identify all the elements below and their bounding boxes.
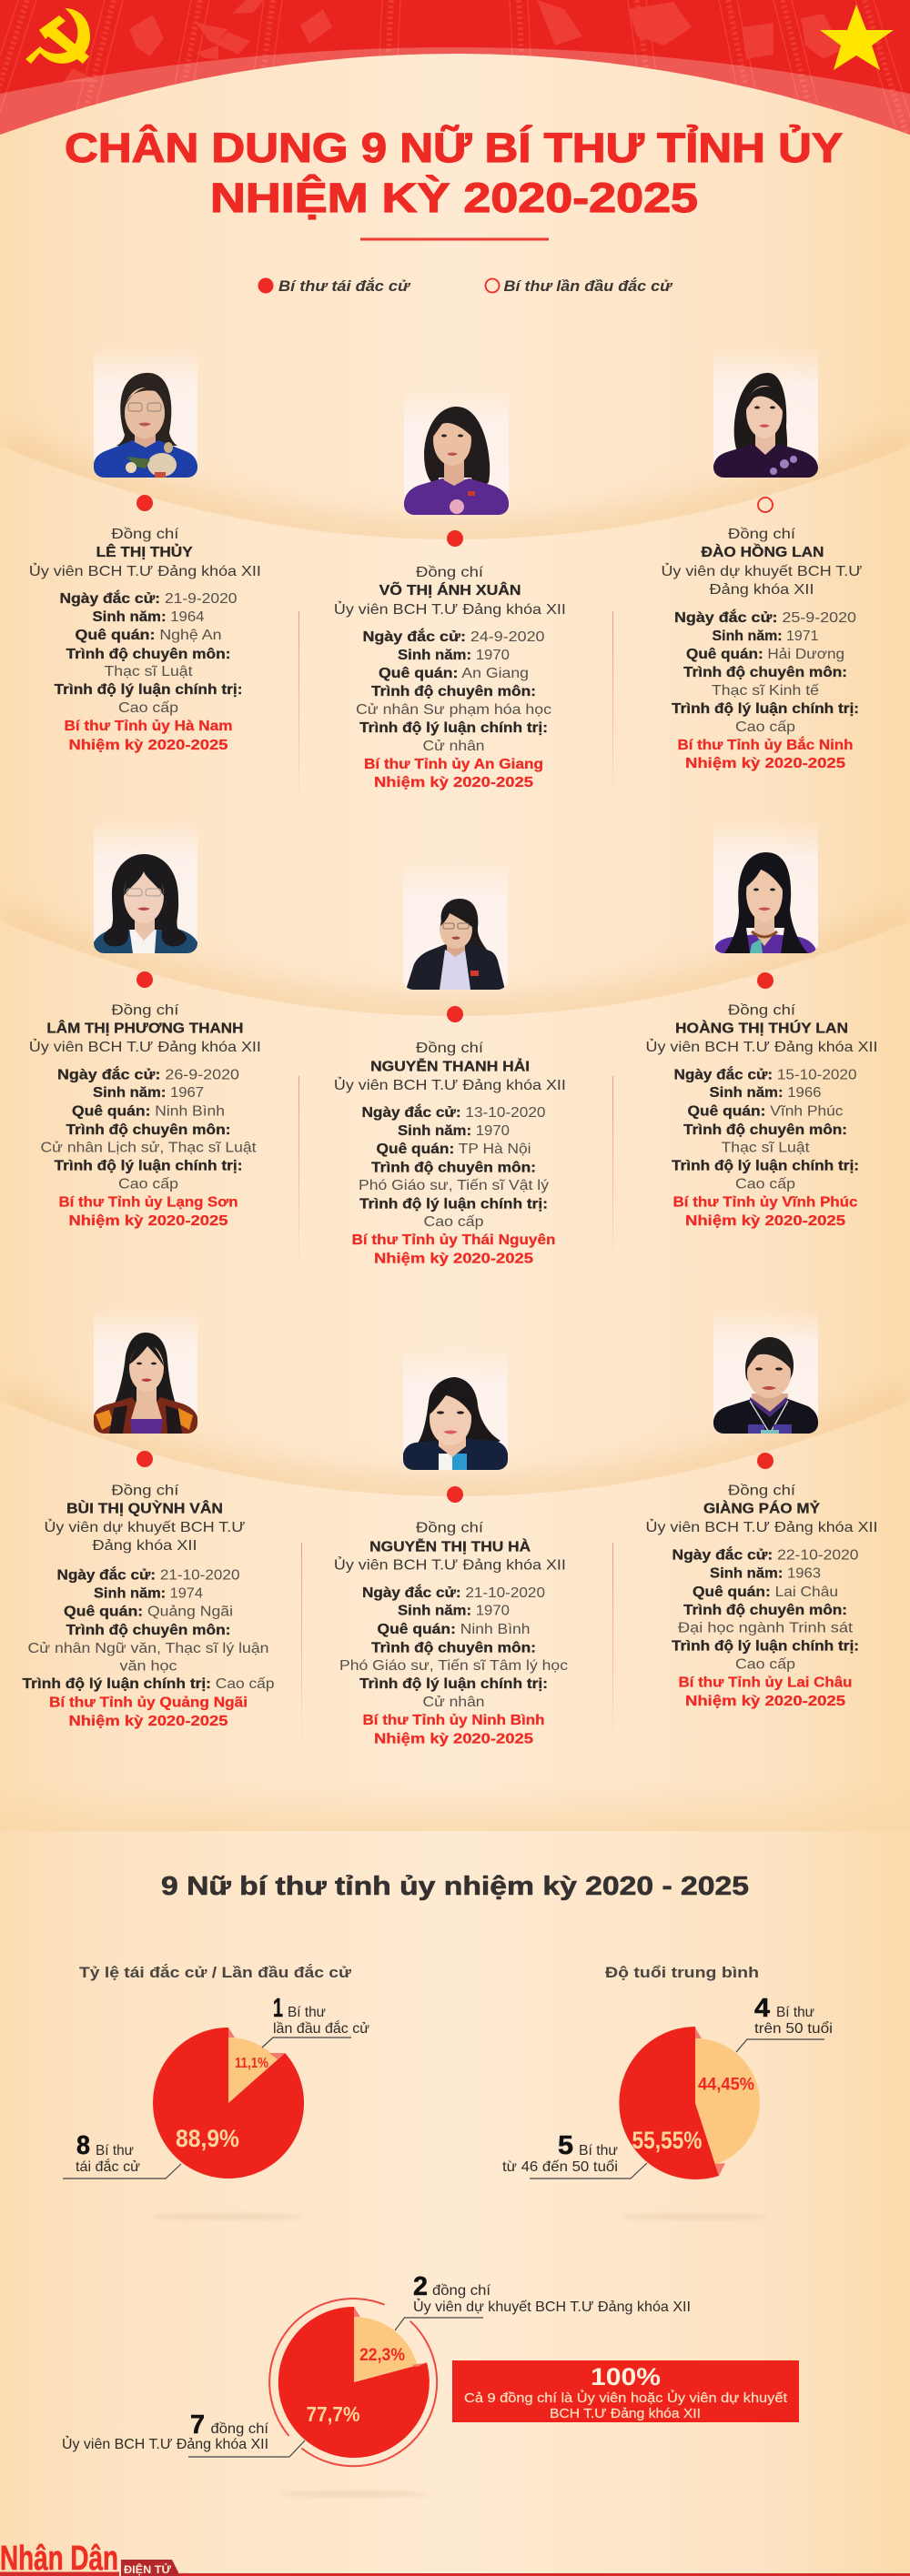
bio text: Giang Pao My: Nhiệm kỳ 2020-2025 bbox=[685, 1694, 845, 1709]
bio text: Le Thi Thuy bbox=[29, 527, 261, 753]
portrait: Lam Thi Phuong Thanh bbox=[94, 819, 197, 953]
bio text: Bui Thi Quynh Van: Cử nhân Ngữ văn, Thạc sĩ lý luận bbox=[27, 1641, 269, 1656]
callout: first elected: 1 bbox=[273, 1994, 283, 2023]
column dividers bbox=[298, 611, 613, 1747]
bio text: Bui Thi Quynh Van: Ngày đắc cử: 21-10-2020 bbox=[56, 1566, 240, 1583]
box text: Cả 9 đồng chí là Ủy viên hoặc Ủy viên dự khuyết bbox=[464, 2390, 788, 2406]
callout box: 100 percent bbox=[452, 2360, 799, 2422]
bio text: Nguyen Thi Thu Ha bbox=[334, 1521, 568, 1746]
bio text: Giang Pao My: Trình độ lý luận chính trị: bbox=[672, 1639, 859, 1654]
portrait: Bui Thi Quynh Van bbox=[94, 1307, 197, 1434]
bio text: Hoang Thi Thuy Lan: Cao cấp bbox=[735, 1177, 795, 1192]
portrait: Nguyen Thanh Hai bbox=[403, 860, 508, 990]
bio text: Giang Pao My bbox=[646, 1483, 877, 1709]
bio text: Giang Pao My: GIÀNG PÁO MỶ bbox=[703, 1499, 820, 1517]
bio text: Nguyen Thanh Hai: Trình độ chuyên môn: bbox=[371, 1161, 536, 1175]
bio text: Hoang Thi Thuy Lan: HOÀNG THỊ THÚY LAN bbox=[675, 1019, 848, 1037]
bio text: Lam Thi Phuong Thanh: LÂM THỊ PHƯƠNG THANH bbox=[46, 1019, 243, 1037]
bio text: Hoang Thi Thuy Lan: Bí thư Tỉnh ủy Vĩnh Phúc bbox=[673, 1195, 858, 1210]
bio text: Nguyen Thi Thu Ha: Cử nhân bbox=[422, 1695, 484, 1710]
panel: Nguyen Thanh Hai bbox=[334, 860, 566, 1266]
bio text: Bui Thi Quynh Van: Nhiệm kỳ 2020-2025 bbox=[69, 1714, 228, 1729]
callout: 46 to 50: từ 46 đến 50 tuổi bbox=[502, 2158, 618, 2175]
callout: alternate members: 2 bbox=[413, 2272, 428, 2301]
bio text: Lam Thi Phuong Thanh: Trình độ chuyên môn: bbox=[66, 1122, 231, 1138]
panel: Dao Hong Lan bbox=[661, 346, 863, 771]
panel: Nguyen Thi Thu Ha bbox=[334, 1346, 568, 1746]
callout: full members bbox=[62, 2410, 305, 2457]
bio text: Lam Thi Phuong Thanh: Cao cấp bbox=[118, 1177, 178, 1192]
legend label: first elected: Bí thư lần đầu đắc cử bbox=[504, 277, 673, 295]
bio text: Lam Thi Phuong Thanh: Đồng chí bbox=[111, 1002, 179, 1019]
bio text: Nguyen Thanh Hai: Ủy viên BCH T.Ư Đảng khóa XII bbox=[334, 1076, 566, 1093]
bio text: Giang Pao My: Bí thư Tỉnh ủy Lai Châu bbox=[679, 1675, 852, 1690]
panel: Le Thi Thuy bbox=[29, 346, 261, 753]
bio text: Dao Hong Lan: Đảng khóa XII bbox=[710, 582, 814, 598]
status ring bbox=[758, 498, 773, 512]
bio text: Lam Thi Phuong Thanh: Bí thư Tỉnh ủy Lạng Sơn bbox=[58, 1195, 238, 1210]
panel: Hoang Thi Thuy Lan bbox=[646, 819, 877, 1229]
chart title: Độ tuổi trung bình bbox=[605, 1964, 759, 1981]
panel: Giang Pao My bbox=[646, 1307, 877, 1709]
bio text: Dao Hong Lan: Quê quán: Hải Dương bbox=[686, 647, 844, 662]
callout: over 50: Bí thư bbox=[776, 2005, 814, 2020]
slice label: 11.1 percent: 11,1% bbox=[235, 2056, 268, 2071]
bio text: Nguyen Thanh Hai: Nhiệm kỳ 2020-2025 bbox=[374, 1252, 533, 1266]
portrait: Le Thi Thuy bbox=[94, 346, 197, 478]
bio text: Le Thi Thuy: LÊ THỊ THỦY bbox=[96, 543, 193, 560]
panel: Vo Thi Anh Xuan bbox=[334, 387, 566, 790]
statistics heading: 9 Nữ bí thư tỉnh ủy nhiệm kỳ 2020 - 2025 bbox=[161, 1872, 749, 1901]
bio text: Nguyen Thanh Hai: NGUYỄN THANH HẢI bbox=[370, 1057, 530, 1075]
bio text: Le Thi Thuy: Ngày đắc cử: 21-9-2020 bbox=[60, 589, 238, 607]
box text: BCH T.Ư Đảng khóa XII bbox=[550, 2406, 701, 2421]
legend bbox=[258, 277, 673, 295]
bio text: Dao Hong Lan: Bí thư Tỉnh ủy Bắc Ninh bbox=[677, 736, 854, 753]
footer rule bbox=[0, 2572, 910, 2576]
bio text: Vo Thi Anh Xuan: Quê quán: An Giang bbox=[379, 666, 529, 681]
portrait: Vo Thi Anh Xuan bbox=[404, 387, 509, 515]
callout: re-elected: Bí thư bbox=[96, 2143, 134, 2158]
bio text: Dao Hong Lan: Sinh năm: 1971 bbox=[712, 629, 819, 644]
bio text: Nguyen Thanh Hai: Quê quán: TP Hà Nội bbox=[377, 1142, 531, 1157]
bio text: Hoang Thi Thuy Lan: Đồng chí bbox=[728, 1002, 796, 1019]
bio text: Bui Thi Quynh Van: Bí thư Tỉnh ủy Quảng Ngãi bbox=[49, 1696, 248, 1710]
bio text: Vo Thi Anh Xuan bbox=[334, 565, 566, 790]
portrait: Hoang Thi Thuy Lan bbox=[713, 819, 818, 953]
callout: first elected bbox=[262, 1994, 369, 2048]
slice label: 44.45 percent: 44,45% bbox=[698, 2076, 754, 2094]
bio text: Dao Hong Lan: Nhiệm kỳ 2020-2025 bbox=[685, 756, 845, 771]
slice label: 55.55 percent: 55,55% bbox=[632, 2127, 703, 2154]
bio text: Dao Hong Lan: ĐÀO HỒNG LAN bbox=[701, 543, 824, 560]
status dot bbox=[447, 1486, 463, 1503]
portrait: Nguyen Thi Thu Ha bbox=[403, 1346, 508, 1470]
bio text: Hoang Thi Thuy Lan: Ngày đắc cử: 15-10-2020 bbox=[673, 1066, 857, 1082]
bio text: Lam Thi Phuong Thanh: Nhiệm kỳ 2020-2025 bbox=[69, 1213, 228, 1229]
bio text: Dao Hong Lan: Trình độ chuyên môn: bbox=[683, 665, 847, 680]
callout: re-elected bbox=[63, 2131, 181, 2179]
bio text: Dao Hong Lan: Ngày đắc cử: 25-9-2020 bbox=[674, 609, 856, 626]
bio text: Nguyen Thi Thu Ha: NGUYỄN THỊ THU HÀ bbox=[369, 1537, 531, 1555]
bio text: Lam Thi Phuong Thanh bbox=[29, 1002, 261, 1229]
status dot bbox=[136, 495, 153, 511]
callout: first elected: lần đầu đắc cử bbox=[273, 2019, 369, 2037]
bio text: Vo Thi Anh Xuan: Ủy viên BCH T.Ư Đảng khóa XII bbox=[334, 600, 566, 618]
callout: over 50: 4 bbox=[754, 1994, 770, 2023]
status dot bbox=[447, 530, 463, 547]
callout: full members: Ủy viên BCH T.Ư Đảng khóa XII bbox=[62, 2435, 268, 2452]
status dot bbox=[136, 1451, 153, 1467]
bio text: Nguyen Thanh Hai: Ngày đắc cử: 13-10-2020 bbox=[362, 1103, 546, 1121]
bio text: Le Thi Thuy: Bí thư Tỉnh ủy Hà Nam bbox=[64, 719, 233, 734]
row arcs bbox=[0, 446, 910, 1496]
bio text: Giang Pao My: Đồng chí bbox=[728, 1483, 796, 1499]
bio text: Le Thi Thuy: Cao cấp bbox=[118, 700, 178, 716]
bio text: Lam Thi Phuong Thanh: Trình độ lý luận chính trị: bbox=[55, 1159, 242, 1173]
callout: re-elected: tái đắc cử bbox=[76, 2158, 140, 2175]
pie shadow bbox=[152, 2214, 303, 2219]
bio text: Giang Pao My: Trình độ chuyên môn: bbox=[683, 1603, 847, 1618]
bio text: Le Thi Thuy: Đồng chí bbox=[111, 527, 179, 542]
bio text: Bui Thi Quynh Van: Đảng khóa XII bbox=[93, 1538, 197, 1554]
bio text: Vo Thi Anh Xuan: Cử nhân Sư phạm hóa học bbox=[356, 702, 551, 718]
bio text: Nguyen Thi Thu Ha: Ngày đắc cử: 21-10-2020 bbox=[362, 1584, 545, 1601]
bio text: Hoang Thi Thuy Lan bbox=[646, 1002, 877, 1229]
bio text: Nguyen Thi Thu Ha: Phó Giáo sư, Tiến sĩ Tâm lý học bbox=[339, 1658, 568, 1674]
pie slices bbox=[153, 2028, 304, 2179]
slice label: 88.9 percent: 88,9% bbox=[176, 2125, 239, 2152]
status dot bbox=[757, 972, 774, 989]
header band bbox=[0, 0, 910, 146]
callout: over 50 bbox=[736, 1994, 833, 2052]
title: NHIỆM KỲ 2020-2025 bbox=[210, 175, 698, 221]
tab text: ĐIỆN TỬ bbox=[124, 2562, 171, 2576]
bio text: Hoang Thi Thuy Lan: Nhiệm kỳ 2020-2025 bbox=[685, 1213, 845, 1229]
bio text: Bui Thi Quynh Van: BÙI THỊ QUỲNH VÂN bbox=[66, 1499, 223, 1517]
bio text: Lam Thi Phuong Thanh: Ủy viên BCH T.Ư Đảng khóa XII bbox=[29, 1038, 261, 1055]
bio text: Vo Thi Anh Xuan: Ngày đắc cử: 24-9-2020 bbox=[362, 628, 545, 645]
bio text: Nguyen Thi Thu Ha: Bí thư Tỉnh ủy Ninh Bình bbox=[362, 1713, 544, 1728]
bio text: Nguyen Thi Thu Ha: Sinh năm: 1970 bbox=[398, 1603, 510, 1619]
bio text: Nguyen Thanh Hai: Trình độ lý luận chính trị: bbox=[359, 1197, 548, 1212]
panel: Bui Thi Quynh Van bbox=[22, 1307, 275, 1729]
digital tab bbox=[121, 2560, 180, 2576]
callout: alternate members: đồng chí bbox=[432, 2283, 491, 2299]
callout: full members: đồng chí bbox=[211, 2421, 269, 2437]
chart: re-election ratio bbox=[63, 1964, 369, 2219]
slice label: 77.7 percent: 77,7% bbox=[306, 2402, 360, 2426]
pie shadow bbox=[620, 2214, 769, 2219]
bio text: Nguyen Thanh Hai: Phó Giáo sư, Tiến sĩ Vật lý bbox=[359, 1178, 549, 1193]
bio text: Nguyen Thanh Hai: Bí thư Tỉnh ủy Thái Nguyên bbox=[351, 1233, 555, 1248]
bio text: Bui Thi Quynh Van: Sinh năm: 1974 bbox=[94, 1586, 203, 1601]
section break shading bbox=[0, 1783, 910, 1831]
callout: 46 to 50: Bí thư bbox=[579, 2143, 618, 2158]
bio text: Nguyen Thanh Hai: Sinh năm: 1970 bbox=[398, 1123, 510, 1139]
bio text: Giang Pao My: Ủy viên BCH T.Ư Đảng khóa XII bbox=[646, 1518, 877, 1535]
bio text: Nguyen Thi Thu Ha: Quê quán: Ninh Bình bbox=[377, 1622, 530, 1637]
bio text: Vo Thi Anh Xuan: Sinh năm: 1970 bbox=[398, 648, 510, 663]
bio text: Le Thi Thuy: Trình độ chuyên môn: bbox=[66, 647, 231, 662]
bio text: Dao Hong Lan: Cao cấp bbox=[735, 719, 795, 735]
legend dot: re-elected bbox=[258, 278, 273, 293]
bio text: Le Thi Thuy: Sinh năm: 1964 bbox=[93, 609, 205, 625]
bio text: Giang Pao My: Sinh năm: 1963 bbox=[710, 1566, 821, 1581]
bio text: Le Thi Thuy: Thạc sĩ Luật bbox=[104, 664, 193, 679]
icon: hammer and sickle bbox=[25, 8, 90, 64]
bio text: Hoang Thi Thuy Lan: Trình độ chuyên môn: bbox=[683, 1122, 847, 1138]
portrait: Dao Hong Lan bbox=[713, 346, 818, 478]
bio text: Bui Thi Quynh Van: Đồng chí bbox=[111, 1483, 179, 1499]
bio text: Hoang Thi Thuy Lan: Trình độ lý luận chính trị: bbox=[672, 1159, 859, 1173]
callout: alternate members bbox=[395, 2272, 691, 2330]
legend label: re-elected: Bí thư tái đắc cử bbox=[278, 277, 411, 295]
bio text: Bui Thi Quynh Van: Trình độ chuyên môn: bbox=[66, 1623, 231, 1638]
pie slices bbox=[619, 2027, 760, 2179]
bio text: Bui Thi Quynh Van: Ủy viên dự khuyết BCH T.Ư bbox=[44, 1518, 246, 1535]
bio text: Giang Pao My: Ngày đắc cử: 22-10-2020 bbox=[672, 1546, 859, 1563]
bio text: Hoang Thi Thuy Lan: Quê quán: Vĩnh Phúc bbox=[688, 1104, 843, 1119]
bio text: Vo Thi Anh Xuan: Nhiệm kỳ 2020-2025 bbox=[374, 775, 533, 790]
bio text: Nguyen Thi Thu Ha: Nhiệm kỳ 2020-2025 bbox=[374, 1732, 533, 1746]
bio text: Giang Pao My: Cao cấp bbox=[735, 1657, 795, 1672]
title rule bbox=[360, 238, 549, 240]
bio text: Nguyen Thi Thu Ha: Trình độ chuyên môn: bbox=[371, 1641, 536, 1655]
status dot bbox=[757, 1453, 774, 1469]
callout: re-elected: 8 bbox=[76, 2131, 90, 2160]
bio text: Vo Thi Anh Xuan: Trình độ chuyên môn: bbox=[371, 684, 536, 699]
bio text: Nguyen Thanh Hai: Cao cấp bbox=[424, 1214, 484, 1230]
slice label: 22.3 percent: 22,3% bbox=[359, 2346, 405, 2365]
bio text: Dao Hong Lan: Trình độ lý luận chính trị: bbox=[672, 701, 859, 717]
bio text: Lam Thi Phuong Thanh: Ngày đắc cử: 26-9-2020 bbox=[57, 1066, 239, 1082]
bio text: Nguyen Thi Thu Ha: Trình độ lý luận chính trị: bbox=[359, 1676, 548, 1692]
chart: average age bbox=[502, 1964, 833, 2219]
bio text: Hoang Thi Thuy Lan: Ủy viên BCH T.Ư Đảng khóa XII bbox=[646, 1038, 877, 1055]
bio text: Lam Thi Phuong Thanh: Quê quán: Ninh Bình bbox=[72, 1104, 225, 1119]
bio text: Le Thi Thuy: Ủy viên BCH T.Ư Đảng khóa XII bbox=[29, 562, 261, 579]
bio text: Le Thi Thuy: Nhiệm kỳ 2020-2025 bbox=[69, 738, 228, 753]
callout: 46 to 50: 5 bbox=[558, 2131, 573, 2160]
callout: over 50: trên 50 tuổi bbox=[754, 2020, 833, 2037]
title: CHÂN DUNG 9 NỮ BÍ THƯ TỈNH ỦY bbox=[65, 125, 843, 171]
status dot bbox=[447, 1006, 463, 1022]
legend dot: first elected bbox=[486, 278, 499, 293]
bio text: Bui Thi Quynh Van: văn học bbox=[120, 1659, 177, 1674]
bio text: Dao Hong Lan: Đồng chí bbox=[728, 527, 796, 542]
portrait: Giang Pao My bbox=[713, 1307, 818, 1434]
bio text: Le Thi Thuy: Quê quán: Nghệ An bbox=[75, 628, 222, 643]
chart title: Tỷ lệ tái đắc cử / Lần đầu đắc cử bbox=[79, 1964, 352, 1981]
bio text: Hoang Thi Thuy Lan: Sinh năm: 1966 bbox=[710, 1085, 822, 1101]
bio text: Vo Thi Anh Xuan: Bí thư Tỉnh ủy An Giang bbox=[364, 757, 543, 772]
bio text: Lam Thi Phuong Thanh: Cử nhân Lịch sử, Thạc sĩ Luật bbox=[40, 1141, 257, 1155]
bio text: Bui Thi Quynh Van: Trình độ lý luận chính trị: Cao cấp bbox=[22, 1676, 275, 1692]
callout: alternate members: Ủy viên dự khuyết BCH T.Ư Đảng khóa XII bbox=[413, 2298, 691, 2315]
bio text: Vo Thi Anh Xuan: Cử nhân bbox=[422, 739, 484, 754]
bio text: Vo Thi Anh Xuan: VÕ THỊ ÁNH XUÂN bbox=[379, 580, 521, 599]
big number: 100% bbox=[591, 2363, 661, 2390]
bio text: Vo Thi Anh Xuan: Đồng chí bbox=[416, 565, 484, 580]
status dot bbox=[136, 971, 153, 988]
bio text: Vo Thi Anh Xuan: Trình độ lý luận chính trị: bbox=[359, 720, 548, 736]
callout: first elected: Bí thư bbox=[288, 2005, 326, 2020]
bio text: Nguyen Thi Thu Ha: Ủy viên BCH T.Ư Đảng khóa XII bbox=[334, 1555, 566, 1574]
callout: full members: 7 bbox=[190, 2410, 205, 2440]
pie shadow bbox=[279, 2491, 429, 2497]
ring bbox=[269, 2299, 437, 2466]
bio text: Bui Thi Quynh Van bbox=[22, 1483, 275, 1729]
pie slices bbox=[278, 2307, 430, 2458]
callout: 46 to 50 bbox=[502, 2131, 647, 2179]
icon: star bbox=[820, 5, 894, 70]
bio text: Dao Hong Lan: Thạc sĩ Kinh tế bbox=[712, 683, 819, 699]
bio text: Nguyen Thanh Hai bbox=[334, 1041, 566, 1266]
title bbox=[65, 125, 843, 221]
panel: Lam Thi Phuong Thanh bbox=[29, 819, 261, 1229]
bio text: Le Thi Thuy: Trình độ lý luận chính trị: bbox=[55, 682, 242, 698]
bio text: Nguyen Thi Thu Ha: Đồng chí bbox=[416, 1521, 484, 1535]
footer logo: Nhan Dan bbox=[0, 2540, 910, 2576]
bio text: Dao Hong Lan: Ủy viên dự khuyết BCH T.Ư bbox=[661, 562, 863, 579]
bio text: Hoang Thi Thuy Lan: Thạc sĩ Luật bbox=[721, 1141, 810, 1155]
bio text: Lam Thi Phuong Thanh: Sinh năm: 1967 bbox=[93, 1085, 204, 1101]
bio text: Nguyen Thanh Hai: Đồng chí bbox=[416, 1041, 484, 1056]
bio text: Giang Pao My: Đại học ngành Trinh sát bbox=[678, 1621, 854, 1635]
bio text: Dao Hong Lan bbox=[661, 527, 863, 771]
chart: Central Committee membership bbox=[62, 2272, 691, 2497]
bio text: Giang Pao My: Quê quán: Lai Châu bbox=[693, 1585, 838, 1600]
bio text: Bui Thi Quynh Van: Quê quán: Quảng Ngãi bbox=[64, 1605, 233, 1619]
